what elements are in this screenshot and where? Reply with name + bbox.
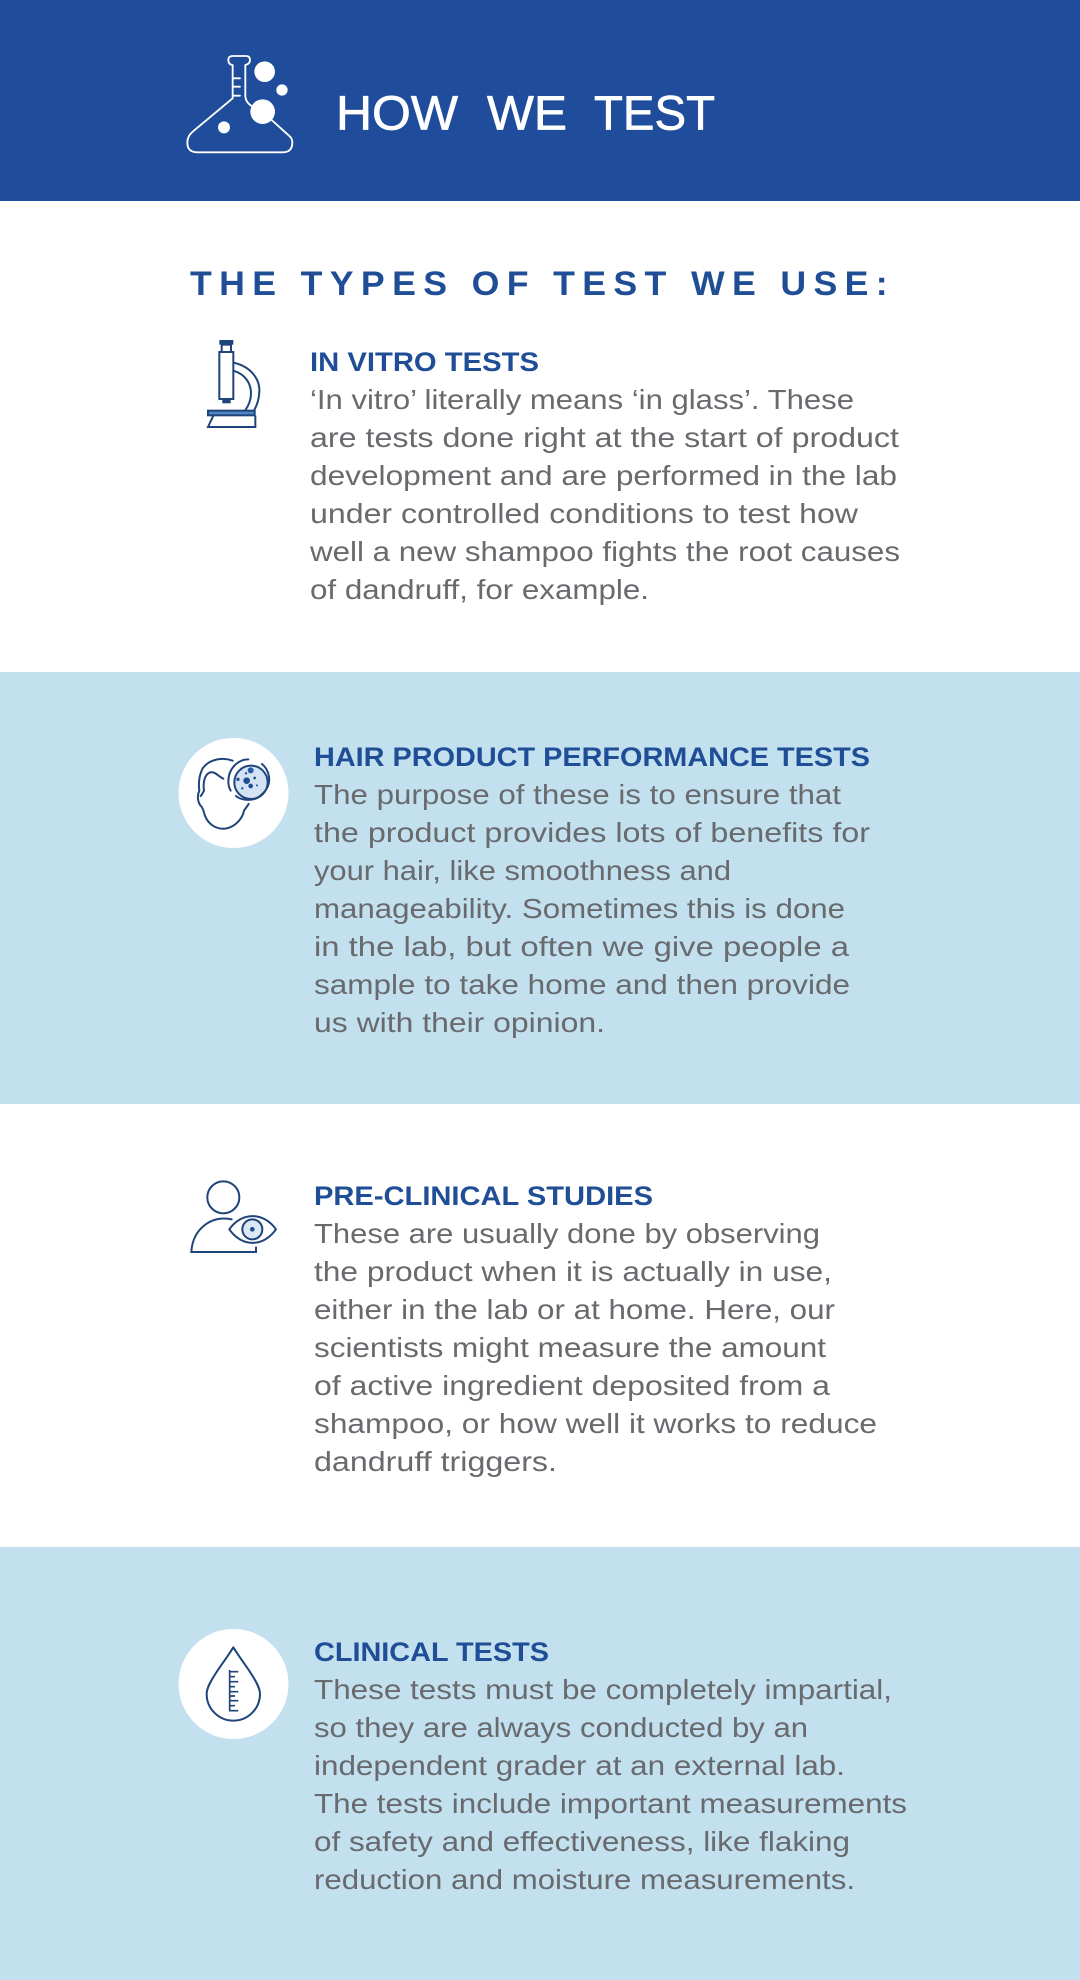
- icon: microscope: [208, 340, 259, 427]
- text block: pre-clinical: of active ingredient deposited from a: [314, 1370, 830, 1401]
- text block: hair product performance: manageability. Sometimes this is done: [314, 893, 845, 924]
- icon: flask with bubbles: [187, 56, 292, 152]
- text block: in vitro: development and are performed in the lab: [310, 460, 897, 491]
- text block: hair product performance: The purpose of these is to ensure that: [314, 779, 841, 810]
- text block: pre-clinical: either in the lab or at home. Here, our: [314, 1294, 835, 1325]
- text block: pre-clinical: These are usually done by observing: [314, 1218, 820, 1249]
- panel: in vitro tests: [208, 340, 900, 605]
- title: TEST: [594, 88, 715, 140]
- text block: pre-clinical: shampoo, or how well it works to reduce: [314, 1408, 877, 1439]
- text block: in vitro: well a new shampoo fights the root causes: [309, 536, 900, 567]
- text block: clinical: The tests include important measurements: [314, 1788, 907, 1819]
- text block: in vitro: are tests done right at the start of product: [310, 422, 899, 453]
- text block: clinical: of safety and effectiveness, like flaking: [314, 1826, 850, 1857]
- text block: clinical: independent grader at an external lab.: [314, 1750, 845, 1781]
- text block: hair product performance: the product provides lots of benefits for: [314, 817, 870, 848]
- icon: head with petri dish: [178, 738, 288, 848]
- text block: hair product performance: in the lab, but often we give people a: [314, 931, 849, 962]
- heading: hair product performance: HAIR PRODUCT PERFORMANCE TESTS: [314, 742, 870, 772]
- text block: pre-clinical: [314, 1218, 877, 1477]
- text block: clinical: [314, 1674, 907, 1895]
- text block: pre-clinical: the product when it is actually in use,: [314, 1256, 832, 1287]
- heading: pre-clinical: PRE-CLINICAL STUDIES: [314, 1181, 653, 1211]
- text block: in vitro: of dandruff, for example.: [310, 574, 649, 605]
- icon: person with eye: [191, 1181, 276, 1252]
- panel: header banner: [0, 0, 1080, 201]
- text block: clinical: reduction and moisture measurements.: [314, 1864, 855, 1895]
- text block: pre-clinical: dandruff triggers.: [314, 1446, 557, 1477]
- text block: clinical: These tests must be completely impartial,: [314, 1674, 892, 1705]
- title: WE: [487, 88, 567, 140]
- title: HOW: [336, 88, 459, 140]
- icon: drop with scale: [178, 1629, 288, 1739]
- panel: pre-clinical studies: [191, 1181, 877, 1477]
- text block: pre-clinical: scientists might measure the amount: [314, 1332, 826, 1363]
- heading: clinical: CLINICAL TESTS: [314, 1637, 549, 1667]
- text block: hair product performance: sample to take home and then provide: [314, 969, 850, 1000]
- text block: in vitro: [309, 384, 900, 605]
- panel: hair product performance tests: [0, 672, 1080, 1104]
- text block: in vitro: ‘In vitro’ literally means ‘in glass’. These: [310, 384, 854, 415]
- text block: hair product performance: us with their opinion.: [314, 1007, 605, 1038]
- title: [336, 88, 715, 140]
- text block: hair product performance: [314, 779, 870, 1038]
- panel: clinical tests: [0, 1547, 1080, 1980]
- text block: in vitro: under controlled conditions to test how: [310, 498, 859, 529]
- text block: clinical: so they are always conducted by an: [314, 1712, 808, 1743]
- heading: in vitro: IN VITRO TESTS: [310, 347, 539, 377]
- text block: hair product performance: your hair, like smoothness and: [314, 855, 731, 886]
- heading: types of test: THE TYPES OF TEST WE USE:: [190, 265, 895, 303]
